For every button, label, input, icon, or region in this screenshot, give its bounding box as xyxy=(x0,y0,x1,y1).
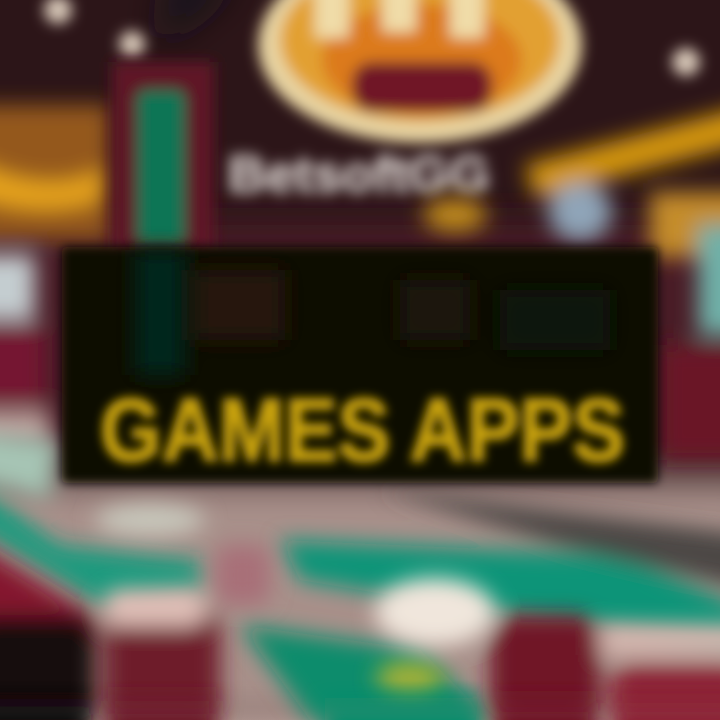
panel: green column xyxy=(112,62,214,252)
soft bottom edge of chips and table xyxy=(0,680,720,720)
ceiling lights xyxy=(44,0,700,76)
title: GAMES APPS: GAMES APPS xyxy=(100,381,625,481)
panel: left orange bar counter xyxy=(0,105,110,450)
panel: black title banner xyxy=(62,247,658,483)
panel: right yellow bar lights xyxy=(423,105,720,460)
heading: brand logo text: BetsoftGG xyxy=(228,146,490,204)
panel: green poker table xyxy=(0,430,720,720)
floor bottom edge xyxy=(0,670,720,720)
poker chips in foreground xyxy=(0,504,720,720)
icon: flaming crown emblem xyxy=(258,0,582,143)
title line: obscured dark text xyxy=(135,250,610,375)
